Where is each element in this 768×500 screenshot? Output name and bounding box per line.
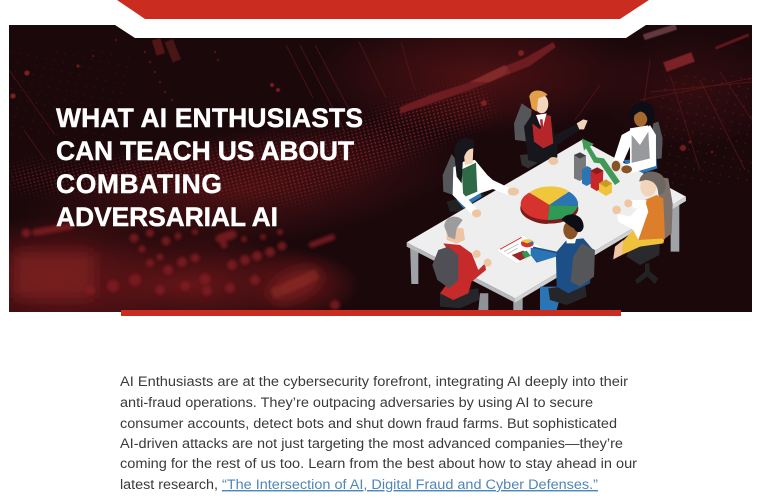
title xyxy=(56,103,363,232)
title: CAN TEACH US ABOUT xyxy=(56,136,354,166)
person: woman in green vest xyxy=(443,138,500,212)
person: woman in orange vest xyxy=(612,172,673,284)
person: man in red vest xyxy=(514,91,588,168)
white notch cut into banner top xyxy=(115,25,646,38)
bottom red accent bar xyxy=(121,310,621,316)
report link: “The Intersection of AI, Digital Fraud and Cyber Defenses.” xyxy=(222,477,598,493)
person: man in red sweater xyxy=(432,217,492,308)
meeting table xyxy=(407,140,686,310)
person: woman in grey vest xyxy=(623,102,663,177)
body paragraph: anti-fraud operations. They’re outpacing adversaries by using AI to secure xyxy=(120,395,593,411)
body paragraph: AI-driven attacks are not just targeting the most advanced companies—they’re xyxy=(120,436,623,452)
perspective lines xyxy=(9,42,752,170)
illustration: meeting around a table xyxy=(407,91,686,310)
title: ADVERSARIAL AI xyxy=(56,202,278,232)
body paragraph: consumer accounts, detect bots and shut down fraud farms. But sophisticated xyxy=(120,416,617,432)
forearms and hands resting on the table xyxy=(453,130,656,217)
title: WHAT AI ENTHUSIASTS xyxy=(56,103,363,133)
report document xyxy=(496,235,543,264)
body paragraph: AI Enthusiasts are at the cybersecurity forefront, integrating AI deeply into their xyxy=(120,374,628,390)
top red ribbon xyxy=(117,0,649,19)
title: COMBATING xyxy=(56,169,222,199)
hero banner xyxy=(9,25,752,312)
person: man in blue jacket xyxy=(531,214,595,310)
body paragraph: coming for the rest of us too. Learn from the best about how to stay ahead in our xyxy=(120,456,637,472)
body paragraph: latest research, xyxy=(120,477,218,493)
bar chart with rising arrow xyxy=(574,138,620,196)
pie chart xyxy=(520,186,578,224)
banner background xyxy=(9,25,752,312)
body paragraph xyxy=(120,374,637,493)
